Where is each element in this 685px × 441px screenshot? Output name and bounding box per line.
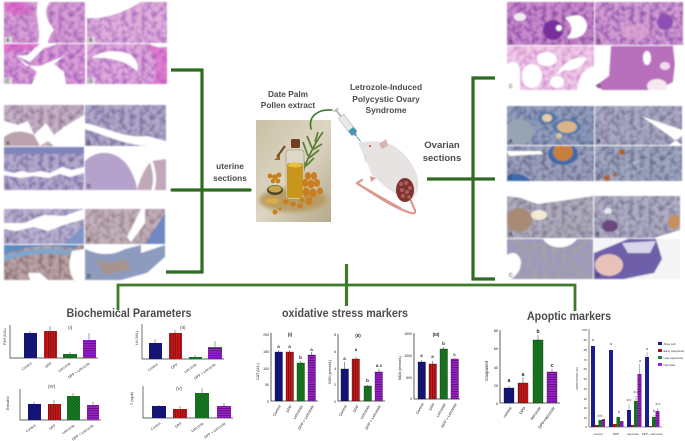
micrograph C: C	[509, 273, 513, 279]
bar chart: apoptosis flow cytometry: b	[653, 409, 655, 413]
bar chart: apoptosis flow cytometry: 60	[584, 367, 587, 371]
bar chart: biochemical V: Letrozole	[190, 422, 205, 433]
bar chart: CAT: DPP + Letrozole	[298, 404, 315, 430]
bar chart: MDA: DPP + Letrozole	[441, 402, 458, 428]
bar chart: MDA: MDA (pmmol/L)	[398, 356, 402, 380]
micrograph B	[594, 105, 683, 146]
bar chart: GSH: 2	[334, 383, 336, 387]
micrograph C: C	[6, 274, 10, 280]
bar chart: biochemical I: Control	[21, 361, 33, 371]
legend: apoptosis stages: Alive cell	[664, 342, 676, 346]
micrograph A: A	[509, 139, 513, 145]
bar chart: caspase 3: control	[502, 406, 513, 418]
bar chart: caspase 3: 80	[494, 329, 498, 333]
bar chart: biochemical II: DPP	[170, 362, 179, 370]
bar chart: apoptosis flow cytometry: APOPTOSIS (%)	[575, 367, 579, 390]
micrograph A: A	[6, 38, 10, 44]
bar chart: apoptosis flow cytometry	[575, 328, 663, 436]
bar chart: apoptosis flow cytometry: a	[610, 342, 612, 346]
micrograph B: B	[597, 39, 601, 45]
bar chart: apoptosis flow cytometry: b c	[656, 402, 661, 406]
bar chart: MDA: 1000	[404, 354, 412, 358]
bar chart: caspase 3: 40	[494, 366, 498, 370]
micrograph D: D	[87, 184, 91, 190]
label: ovarian sections: Ovarian	[424, 140, 460, 151]
bar chart: CAT: (I)	[288, 332, 293, 337]
micrograph C: C	[509, 84, 513, 90]
left bracket connector	[166, 70, 250, 272]
bar chart: apoptosis flow cytometry: letrozole	[627, 432, 639, 436]
panel: ovarian micrographs row 3	[506, 196, 680, 279]
micrograph A: A	[6, 141, 10, 147]
bar chart: MDA: DPP	[428, 402, 436, 411]
micrograph A	[506, 1, 595, 46]
bar chart: GSH: 8	[334, 333, 336, 337]
micrograph B	[84, 208, 166, 245]
bar chart: CAT: 200	[263, 333, 269, 337]
heading: apoptic markers: Apoptic markers	[527, 309, 611, 323]
bar chart: MDA: 1500	[404, 332, 412, 336]
bar chart: apoptosis flow cytometry: b b	[598, 414, 602, 418]
bar chart: caspase 3: Caspase3	[484, 360, 489, 381]
bar chart: GSH: DPP	[352, 404, 360, 413]
bar chart: caspase 3: DPP	[518, 405, 527, 415]
bar chart: GSH	[328, 333, 385, 430]
micrograph D: D	[596, 273, 600, 279]
bar chart: GSH: (II)	[355, 333, 361, 338]
micrograph D: D	[89, 79, 93, 85]
micrograph D: D	[597, 84, 601, 90]
micrograph D	[84, 152, 167, 191]
legend: apoptosis stages: Early apoptosis	[664, 349, 685, 353]
bar chart: biochemical V: Control	[150, 421, 162, 431]
bar chart: GSH: DPP + Letrozole	[365, 404, 382, 430]
bar chart: caspase 3: a	[508, 378, 511, 384]
bar chart: biochemical I: Letrozole	[57, 362, 72, 373]
bar chart: MDA: Letrozole	[436, 402, 447, 418]
bar chart: GSH: Letrozole	[360, 404, 371, 420]
bar chart: CAT: Control	[272, 404, 282, 417]
micrograph B: B	[89, 38, 93, 44]
bar chart: caspase 3: b	[536, 329, 540, 335]
bar chart: GSH: Control	[338, 404, 348, 417]
legend: apoptosis stages: Necrosis	[664, 363, 676, 367]
micrograph B	[86, 1, 168, 44]
micrograph C	[3, 43, 86, 85]
micrograph D: D	[597, 175, 601, 181]
label: date palm pollen extract: Pollen extract	[261, 100, 315, 110]
bar chart: GSH: 0	[334, 400, 336, 404]
bar chart: biochemical IV: Letrozole	[61, 424, 76, 435]
micrograph A	[3, 104, 85, 147]
panel: ovarian micrographs row 1	[507, 2, 683, 93]
bar chart: caspase 3: 60	[494, 347, 498, 351]
bar chart: CAT: 0	[267, 400, 269, 404]
label: letrozole-induced PCOS: Polycystic Ovary	[352, 94, 420, 104]
bar chart: apoptosis flow cytometry: 40	[584, 387, 587, 391]
bar chart: apoptosis flow cytometry: 100	[582, 328, 587, 332]
arrow: curved green arrow to syringe	[310, 110, 332, 129]
bar chart: CAT: CAT (U/L)	[256, 363, 260, 380]
micrograph A	[3, 1, 86, 44]
bar chart: MDA: Control	[415, 402, 425, 415]
bar chart: CAT: DPP	[285, 404, 293, 413]
micrograph D	[86, 43, 168, 85]
micrograph D	[594, 145, 683, 182]
bar chart: biochemical II: Letrozole	[183, 363, 198, 374]
bar chart: apoptosis flow cytometry: 10	[584, 416, 587, 420]
label: letrozole-induced PCOS: Letrozole-Induced	[350, 82, 422, 92]
bar chart: biochemical IV: DPP + Letrozole	[71, 424, 95, 441]
bar chart: biochemical II: LH (IU/L)	[135, 331, 139, 345]
bar chart: apoptosis flow cytometry: 0	[585, 425, 587, 429]
bar chart: apoptosis flow cytometry: 50	[584, 377, 587, 381]
bar chart: apoptosis flow cytometry: a	[646, 347, 648, 351]
bar chart: apoptosis flow cytometry: a	[592, 338, 594, 342]
micrograph A	[506, 105, 595, 146]
micrograph D	[84, 244, 166, 281]
bar chart: biochemical II: Control	[147, 362, 159, 372]
bar chart: MDA: a	[431, 354, 434, 359]
bar chart: MDA: c	[453, 352, 456, 357]
bar chart: GSH: GSH (pmmol/L)	[328, 360, 332, 384]
micrograph C	[506, 45, 595, 91]
micrograph B: B	[87, 238, 91, 244]
bar chart: apoptosis flow cytometry: DPP	[613, 432, 619, 436]
micrograph A: A	[509, 39, 513, 45]
bar chart: apoptosis flow cytometry: a	[639, 359, 641, 363]
micrograph B: B	[596, 232, 600, 238]
micrograph C: C	[509, 175, 513, 181]
bar chart: biochemical V: DPP	[174, 421, 183, 429]
bar chart: MDA	[398, 332, 460, 428]
bar chart: biochemical I	[3, 325, 98, 379]
bar chart: biochemical II	[135, 324, 224, 380]
bar chart: biochemical IV	[6, 384, 101, 441]
micrograph C	[506, 238, 594, 280]
micrograph D: D	[87, 274, 91, 280]
bar chart: caspase 3: DPP+letrozole	[537, 405, 556, 430]
micrograph A: A	[509, 232, 513, 238]
legend: apoptosis stages	[658, 342, 685, 367]
bar chart: biochemical IV: DPP	[48, 423, 57, 431]
bar chart: GSH: a c	[376, 363, 383, 368]
micrograph C	[3, 244, 85, 281]
bar chart: caspase 3: c	[551, 363, 554, 369]
bar chart: apoptosis flow cytometry: b	[618, 410, 620, 414]
bar chart: biochemical I: (I)	[68, 325, 73, 330]
label: uterine sections: sections	[213, 173, 247, 183]
micrograph B	[84, 104, 167, 147]
bar chart: MDA: 500	[406, 376, 412, 380]
bar chart: CAT: b	[299, 355, 302, 360]
bar chart: GSH: a	[343, 356, 346, 361]
bar chart: CAT: a	[277, 344, 280, 349]
bar chart: caspase 3	[484, 329, 560, 430]
micrograph A: A	[6, 238, 10, 244]
image: date palm pollen oil and dates	[256, 120, 331, 222]
bar chart: CAT: Letrozole	[293, 404, 304, 420]
bar chart: apoptosis flow cytometry: 80	[584, 348, 587, 352]
bar chart: apoptosis flow cytometry: a c	[634, 390, 639, 394]
panel: ovarian micrographs row 2	[505, 106, 682, 181]
bar chart: biochemical V	[130, 386, 233, 439]
micrograph B: B	[87, 141, 91, 147]
micrograph A	[506, 195, 594, 239]
icon: syringe	[333, 107, 363, 144]
bar chart: GSH: 6	[334, 350, 336, 354]
micrograph D	[593, 238, 680, 280]
bar chart: apoptosis flow cytometry: a c	[627, 398, 632, 402]
heading: biochemical parameters: Biochemical Parameters	[66, 306, 192, 320]
bar chart: CAT: 100	[263, 367, 269, 371]
bar chart: caspase 3: a	[522, 372, 525, 378]
bar chart: biochemical II: DPP + Letrozole	[193, 363, 217, 380]
micrograph B	[594, 1, 684, 46]
micrograph C	[506, 145, 595, 182]
bar chart: CAT	[256, 332, 318, 430]
bar chart: biochemical IV: Control	[25, 423, 37, 433]
bar chart: apoptosis flow cytometry: 90	[584, 338, 587, 342]
label: letrozole-induced PCOS: Syndrome	[366, 105, 407, 115]
micrograph C	[3, 146, 85, 191]
micrograph C: C	[6, 184, 10, 190]
bar chart: caspase 3: 0	[496, 402, 498, 406]
micrograph A	[3, 208, 85, 245]
bar chart: GSH: b	[366, 378, 369, 383]
panel: uterine micrographs H&E	[4, 2, 167, 85]
micrograph B: B	[597, 139, 601, 145]
bar chart: biochemical IV: (IV)	[48, 384, 56, 389]
bar chart: apoptosis flow cytometry: 70	[584, 358, 587, 362]
bar chart: GSH: a	[355, 347, 358, 352]
bar chart: CAT: 150	[263, 350, 269, 354]
micrograph D	[594, 45, 676, 91]
bar chart: biochemical I: DPP + Letrozole	[67, 362, 91, 379]
legend: apoptosis stages: Late apoptosis	[664, 356, 684, 360]
bar chart: apoptosis flow cytometry: DPP + letrozole	[642, 432, 663, 436]
bar chart: biochemical V: (V)	[176, 386, 182, 391]
bottom bracket connector	[118, 264, 575, 311]
bar chart: biochemical II: (II)	[180, 325, 186, 330]
panel: uterine micrographs row 2	[4, 105, 166, 190]
heading: oxidative stress markers: oxidative stress markers	[282, 308, 408, 320]
bar chart: biochemical V: DPP + Letrozole	[203, 422, 227, 439]
panel: uterine micrographs row 3	[4, 209, 165, 280]
label: date palm pollen extract: Date Palm	[268, 89, 308, 99]
bar chart: GSH: 4	[334, 367, 336, 371]
bar chart: CAT: a	[310, 347, 313, 352]
label: uterine sections: uterine	[216, 161, 244, 171]
bar chart: MDA: b	[442, 341, 445, 346]
bar chart: CAT: 50	[265, 383, 269, 387]
micrograph B	[593, 195, 681, 239]
bar chart: biochemical IV: Estradiol	[6, 396, 10, 410]
bar chart: CAT: a	[288, 344, 291, 349]
label: ovarian sections: sections	[423, 153, 461, 164]
bar chart: apoptosis flow cytometry: 30	[584, 397, 587, 401]
bar chart: caspase 3: 20	[494, 384, 498, 388]
right bracket connector	[427, 78, 495, 279]
bar chart: apoptosis flow cytometry: control	[593, 432, 603, 436]
bar chart: biochemical V: T (ng/dl)	[130, 392, 134, 405]
bar chart: biochemical I: FSH (IU/L)	[3, 328, 7, 345]
bar chart: MDA: 0	[410, 397, 412, 401]
bar chart: biochemical I: DPP	[44, 361, 53, 369]
bar chart: MDA: a	[420, 353, 423, 358]
bar chart: caspase 3: letrozole	[529, 405, 542, 421]
icon: rat with polycystic ovary	[357, 139, 418, 213]
micrograph C: C	[6, 79, 10, 85]
bar chart: MDA: (III)	[433, 332, 440, 337]
bar chart: apoptosis flow cytometry: 20	[584, 406, 587, 410]
